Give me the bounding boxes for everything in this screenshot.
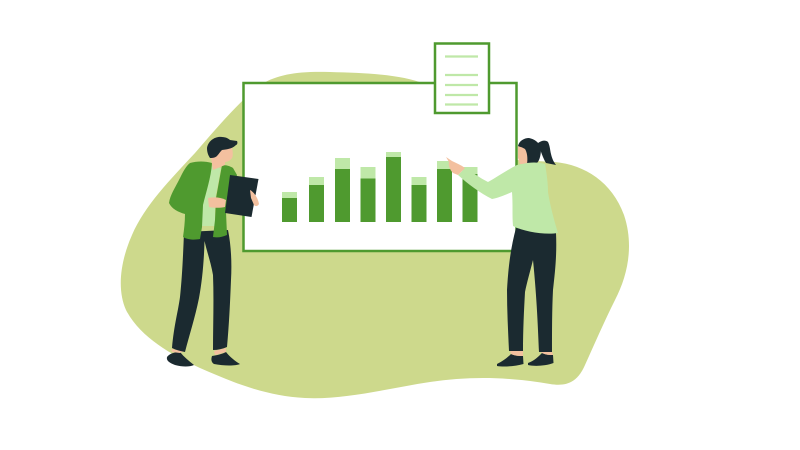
bar chart: [282, 152, 478, 222]
woman: pointing hand: [446, 157, 465, 175]
bar 5: [386, 152, 401, 222]
man: hair and cap: [207, 137, 237, 158]
woman: hair: [518, 138, 541, 164]
man: trousers: [172, 230, 231, 352]
man: neck and face: [211, 147, 233, 170]
document card: [435, 44, 489, 113]
background blob: [121, 72, 629, 398]
bar 3: [335, 158, 350, 222]
bar 1: [282, 192, 297, 222]
woman pointing: [446, 138, 558, 366]
man: fingers: [250, 190, 259, 206]
bar 2: [309, 177, 324, 222]
woman: trousers: [507, 228, 556, 352]
bar 8: [462, 167, 478, 222]
woman: face: [518, 146, 528, 164]
man: shirt: [202, 166, 221, 226]
bar 7: [437, 161, 452, 222]
man: jacket: [169, 162, 237, 240]
man: forearm and hand: [208, 197, 226, 208]
bar 6: [412, 177, 426, 222]
woman: ankles: [510, 350, 553, 356]
man: tablet: [225, 175, 258, 217]
presentation board: [244, 83, 516, 251]
man with tablet: [167, 137, 259, 366]
bar 4: [360, 167, 376, 222]
woman: shoes: [497, 353, 554, 366]
man: ankles: [171, 348, 226, 355]
woman: sweater: [458, 162, 558, 234]
woman: ponytail: [538, 141, 556, 165]
man: shoes: [167, 352, 240, 366]
